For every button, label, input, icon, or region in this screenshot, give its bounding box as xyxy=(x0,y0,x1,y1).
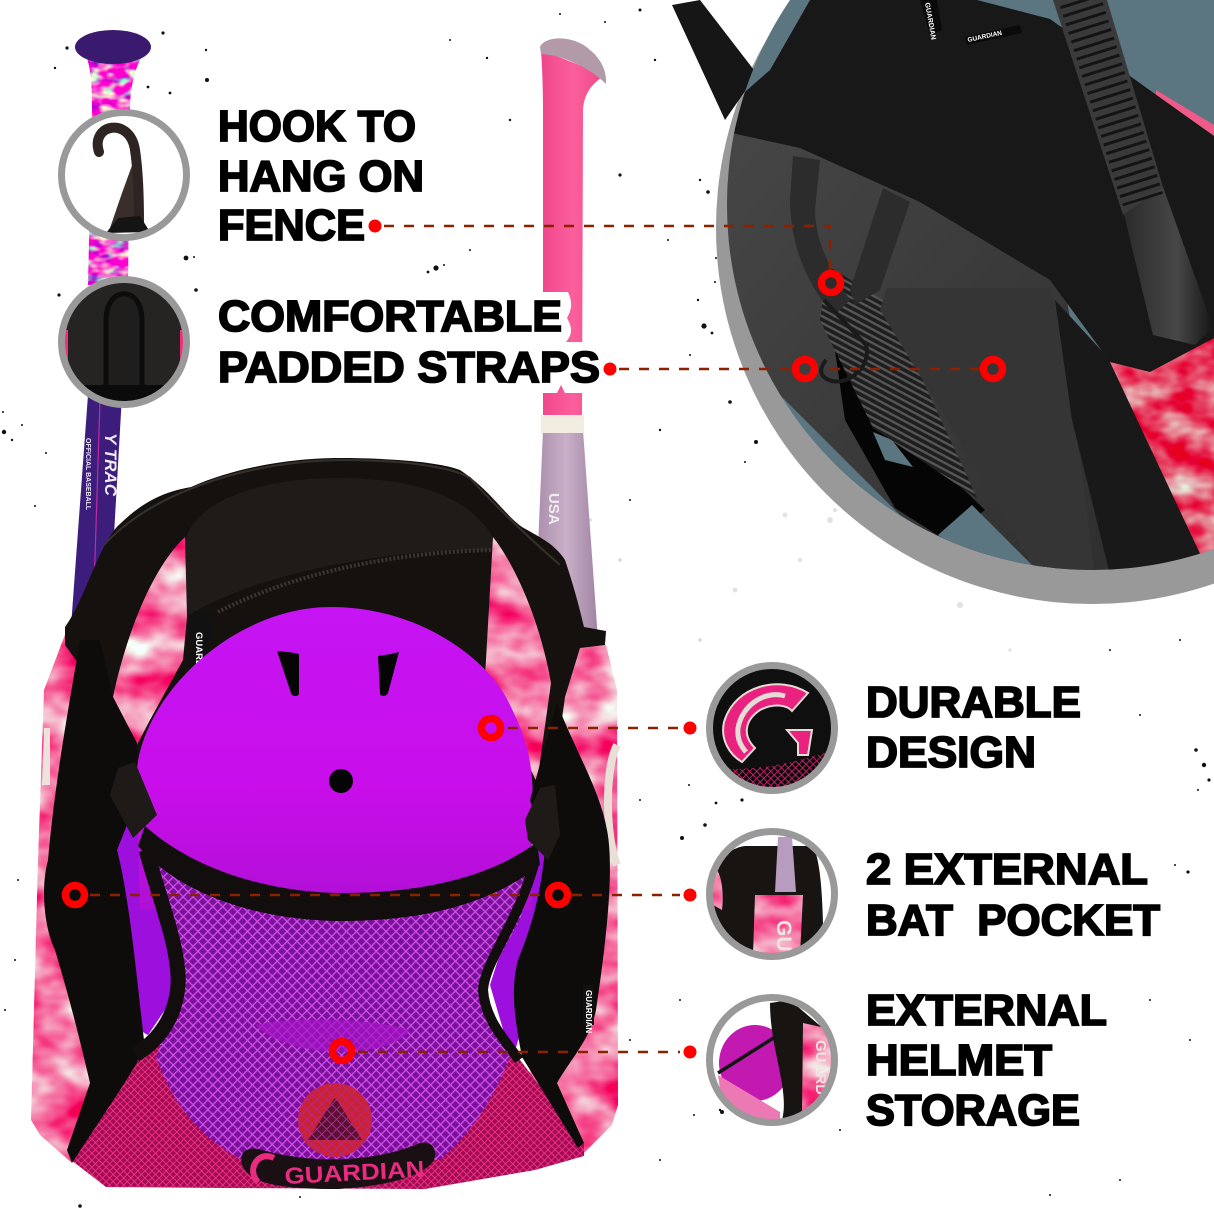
heading: external bat pocket: BAT POCKET xyxy=(866,897,1160,945)
hook buckle xyxy=(106,216,150,233)
hook curve xyxy=(98,128,139,222)
mesh pocket xyxy=(150,840,537,1160)
shade xyxy=(84,385,164,401)
top right detail circle xyxy=(672,0,1214,610)
heading: external helmet storage: STORAGE xyxy=(866,1087,1080,1135)
zipper pull tag xyxy=(187,611,213,683)
webbing strip xyxy=(820,265,977,498)
heading: durable design xyxy=(866,679,1081,777)
shaft small lettering: OFFICIAL BASEBALL xyxy=(84,438,91,511)
right pink stripe xyxy=(485,537,551,783)
side label tags: GUARDIAN xyxy=(584,990,593,1033)
bat knob xyxy=(540,38,606,84)
left drawstring xyxy=(135,850,178,1055)
heading: comfortable padded straps: COMFORTABLE xyxy=(218,293,562,341)
heading: external helmet storage: EXTERNAL xyxy=(866,987,1107,1035)
heading: external helmet storage: HELMET xyxy=(866,1037,1052,1085)
slate gap xyxy=(938,505,1032,565)
padded straps circle xyxy=(62,280,186,405)
zipper tag xyxy=(920,0,942,41)
bat shaft xyxy=(70,395,122,640)
callout lines xyxy=(90,226,980,1052)
slate background xyxy=(727,0,1214,570)
grey ring xyxy=(716,0,1214,604)
bat shaft xyxy=(534,430,598,640)
black padded top xyxy=(727,0,1214,372)
purple helmet sides xyxy=(117,820,548,1060)
grey back panel xyxy=(727,116,1113,570)
pink panel xyxy=(802,1023,835,1115)
zipper pull tag: GUARDIAN xyxy=(193,632,204,683)
solid red markers xyxy=(368,220,696,1058)
black gap xyxy=(835,350,985,540)
zipper tag two: GUARDIAN xyxy=(967,30,1003,44)
small slate gap xyxy=(873,432,913,467)
left buckle xyxy=(110,762,157,838)
helmet vents xyxy=(277,651,399,793)
purple bat xyxy=(70,30,151,640)
badge G mark xyxy=(253,1156,274,1182)
bat xyxy=(775,837,796,892)
shaft pink stripe xyxy=(94,400,100,590)
left pink patch xyxy=(713,867,723,910)
strap xyxy=(718,1037,775,1073)
right buckle xyxy=(525,785,560,860)
right pink side panel xyxy=(530,640,618,1153)
pocket rim drawcord xyxy=(138,826,540,921)
shaft lettering: USA xyxy=(545,493,562,525)
pink mesh base xyxy=(71,1045,584,1189)
hook body xyxy=(110,166,134,228)
pink upper edge xyxy=(1156,90,1214,136)
pack shell xyxy=(712,846,823,955)
left black strap band xyxy=(44,640,144,1163)
left bat above the ring xyxy=(672,0,757,120)
mesh panel xyxy=(1055,300,1205,575)
grip tape end xyxy=(541,415,584,433)
upper black shell xyxy=(65,458,606,820)
pink bat xyxy=(534,38,606,640)
grip ribs xyxy=(1080,0,1143,200)
heading: durable design: DESIGN xyxy=(866,729,1036,777)
heading: hook to hang on fence: HANG ON xyxy=(218,153,424,201)
heading: comfortable padded straps xyxy=(218,293,600,392)
bat pocket circle xyxy=(710,832,834,956)
backpack xyxy=(31,458,618,1189)
mesh flap xyxy=(718,1075,780,1125)
right drawstring xyxy=(483,860,535,1060)
hollow red markers xyxy=(66,274,1002,1060)
pocket wordmark: GU xyxy=(772,920,795,952)
logo tail xyxy=(787,730,812,755)
logo badge xyxy=(241,1142,435,1189)
pink grip xyxy=(541,50,605,418)
bat knob xyxy=(75,30,151,64)
zipper tag: GUARDIAN xyxy=(923,2,936,41)
left pink stripe xyxy=(113,537,187,745)
hook circle xyxy=(62,112,186,238)
carabiner hook xyxy=(821,300,867,382)
right black strap band xyxy=(514,703,610,1148)
heading: durable design: DURABLE xyxy=(866,679,1081,727)
heading: external helmet storage xyxy=(866,987,1107,1135)
helmet storage circle xyxy=(710,998,835,1125)
emblem mesh overlay xyxy=(298,1083,372,1157)
heading: external bat pocket: 2 EXTERNAL xyxy=(866,846,1148,894)
top pocket panel xyxy=(186,478,493,617)
shaft lettering: Y TRAC xyxy=(101,433,120,497)
left pink side panel xyxy=(31,632,120,1163)
zipper tag two xyxy=(965,25,1022,45)
heading: external bat pocket xyxy=(866,846,1160,945)
centre back pad xyxy=(880,288,1095,575)
mesh emblem xyxy=(298,1083,372,1157)
pink panel xyxy=(1110,338,1214,570)
pack xyxy=(770,1000,825,1120)
front zipper xyxy=(218,550,493,612)
helmet xyxy=(719,1025,791,1101)
logo crescent xyxy=(723,684,808,762)
side logo arc xyxy=(608,745,617,865)
detail scene xyxy=(727,0,1214,570)
pink mesh strip xyxy=(730,752,826,787)
heading: hook to hang on fence xyxy=(218,103,424,250)
top seam xyxy=(104,460,560,565)
heading: hook to hang on fence: HOOK TO xyxy=(218,103,416,151)
heading: comfortable padded straps: PADDED STRAPS xyxy=(218,344,600,392)
pink edges xyxy=(64,330,186,362)
callout markers xyxy=(66,220,1002,1060)
helmet seen through mesh xyxy=(255,1020,410,1052)
bat grip xyxy=(1053,0,1163,215)
bat handle xyxy=(1123,187,1213,345)
durable design circle xyxy=(710,666,840,800)
badge wordmark: GUARDIAN xyxy=(284,1156,425,1189)
pink pocket xyxy=(753,895,803,955)
side panel lettering xyxy=(42,728,50,785)
emblem mark xyxy=(308,1097,362,1140)
panel wordmark: GUARD xyxy=(812,1040,829,1095)
right strap loop xyxy=(850,188,910,305)
bat camo grip xyxy=(87,58,141,285)
strap loop xyxy=(106,294,142,400)
left strap loop xyxy=(790,156,850,315)
crescent white band xyxy=(738,695,785,752)
faded grey speckles xyxy=(588,508,1012,652)
heading: hook to hang on fence: FENCE xyxy=(218,202,365,250)
purple helmet xyxy=(136,607,533,910)
white text cut-out over grip xyxy=(536,292,590,393)
